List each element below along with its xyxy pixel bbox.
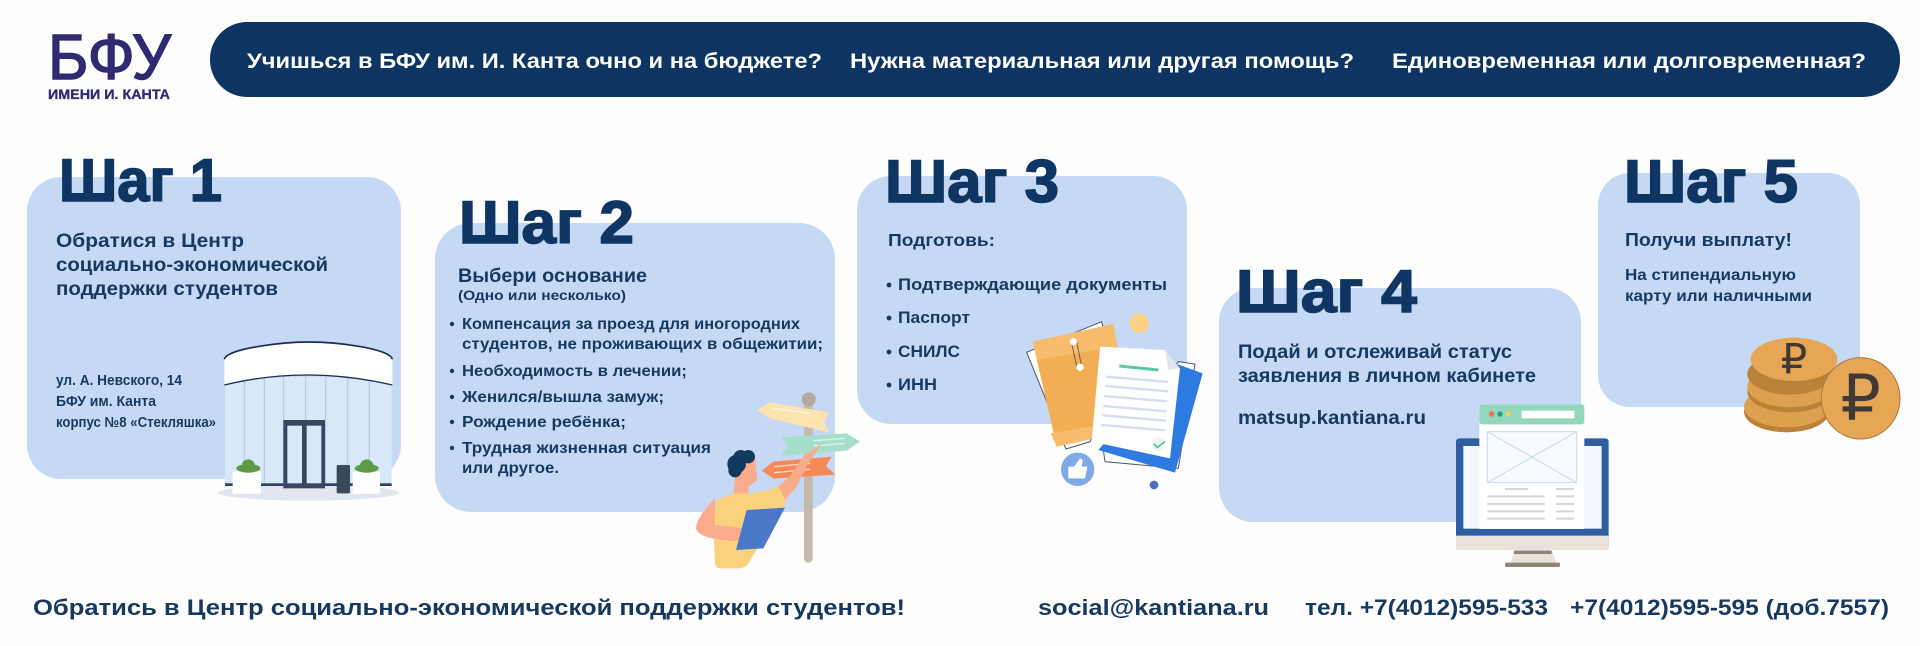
panel: step 1: ул. А. Невского, 14: [56, 373, 182, 389]
panel: step 3: Подготовь:: [888, 230, 995, 250]
panel: step 2: Женился/вышла замуж;: [461, 389, 664, 406]
panel: step 3: [857, 148, 1187, 424]
icon: monitor with web page: [1456, 404, 1609, 567]
panel: step 5: карту или наличными: [1625, 288, 1812, 305]
icon: glass building: [218, 342, 399, 501]
panel: step 2: студентов, не проживающих в общежитии;: [462, 336, 823, 353]
panel: step 4: [1219, 258, 1581, 522]
panel: step 4: Шаг 4: [1236, 258, 1418, 325]
panel: step 1: БФУ им. Канта: [56, 394, 157, 410]
icon: ruble coins: ₽: [1781, 334, 1807, 383]
panel: step 1: поддержки студентов: [56, 278, 278, 300]
footer contacts: +7(4012)595-595 (доб.7557): [1570, 595, 1889, 620]
header bar: Нужна материальная или другая помощь?: [850, 49, 1354, 73]
header bar: Учишься в БФУ им. И. Канта очно и на бюджете?: [247, 49, 822, 73]
panel: step 1: [27, 147, 401, 479]
panel: step 2: Трудная жизненная ситуация: [462, 440, 711, 457]
panel: step 1: социально-экономической: [56, 254, 328, 276]
icon: person at signpost: [696, 392, 860, 568]
footer contacts: Обратись в Центр социально-экономической поддержки студентов!: [33, 595, 905, 620]
footer contacts: [33, 595, 1889, 620]
panel: step 5: [1598, 148, 1860, 407]
icon: documents and envelope: [1027, 314, 1203, 489]
panel: step 1: Шаг 1: [59, 147, 222, 214]
panel: step 3: Подтверждающие документы: [898, 276, 1167, 294]
panel: step 2: (Одно или несколько): [458, 287, 626, 303]
panel: step 5: Шаг 5: [1624, 148, 1798, 215]
panel: step 2: [435, 189, 835, 512]
panel: step 2: Необходимость в лечении;: [462, 363, 687, 380]
header bar: [210, 22, 1900, 97]
panel: step 4: заявления в личном кабинете: [1238, 365, 1536, 387]
footer contacts: social@kantiana.ru: [1038, 595, 1269, 620]
logo: БФУ: [48, 21, 171, 93]
panel: step 4: matsup.kantiana.ru: [1238, 407, 1426, 429]
icon: ruble coins: [1744, 334, 1900, 439]
panel: step 1: Обратися в Центр: [56, 230, 244, 252]
panel: step 5: Получи выплату!: [1625, 230, 1792, 250]
panel: step 2: Выбери основание: [458, 265, 647, 287]
panel: step 1: корпус №8 «Стекляшка»: [56, 415, 216, 431]
footer contacts: тел. +7(4012)595-533: [1305, 595, 1548, 620]
panel: step 2: или другое.: [462, 460, 559, 477]
panel: step 3: СНИЛС: [898, 343, 960, 361]
panel: step 4: Подай и отслеживай статус: [1238, 341, 1512, 363]
panel: step 3: Паспорт: [898, 309, 970, 327]
logo: ИМЕНИ И. КАНТА: [48, 87, 170, 102]
panel: step 2: Компенсация за проезд для иногородних: [462, 316, 800, 333]
icon: ruble coins: ₽: [1841, 361, 1881, 435]
header bar: Единовременная или долговременная?: [1392, 49, 1866, 73]
panel: step 2: Рождение ребёнка;: [462, 414, 626, 431]
panel: step 3: Шаг 3: [885, 148, 1059, 215]
panel: step 3: ИНН: [898, 376, 937, 394]
panel: step 2: Шаг 2: [459, 189, 634, 256]
panel: step 5: На стипендиальную: [1625, 267, 1796, 284]
